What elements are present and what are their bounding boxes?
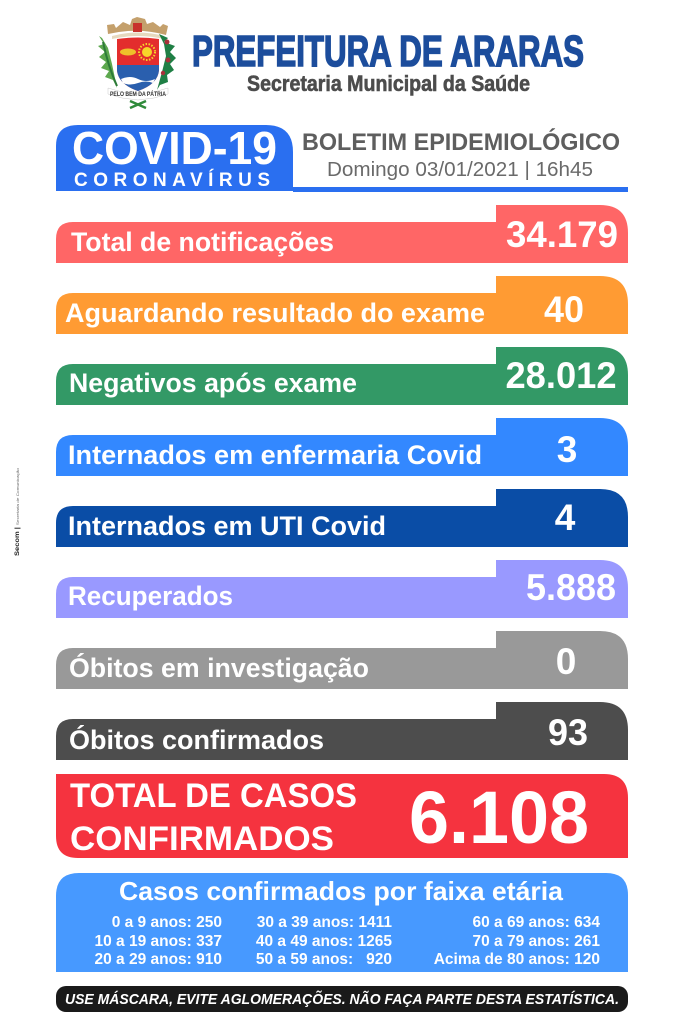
footer message: USE MÁSCARA, EVITE AGLOMERAÇÕES. NÃO FAÇA PARTE DESTA ESTATÍSTICA. bbox=[65, 990, 619, 1008]
row: Total de notificações: Total de notificações bbox=[71, 227, 334, 257]
panel: total de casos confirmados: CONFIRMADOS bbox=[70, 820, 334, 858]
footer message bbox=[56, 986, 628, 1012]
subtitle: Secretaria Municipal da Saúde bbox=[247, 71, 530, 96]
row: Recuperados: 5.888 bbox=[526, 567, 616, 608]
panel: casos por faixa etária: 30 a 39 anos: 1411 bbox=[257, 914, 392, 931]
icon: municipal coat of arms: PELO BEM DA PÁTRIA bbox=[110, 91, 167, 98]
panel: casos por faixa etária: Casos confirmados por faixa etária bbox=[119, 876, 564, 906]
row: Total de notificações: 34.179 bbox=[506, 214, 618, 255]
row: Internados em enfermaria Covid bbox=[56, 418, 628, 476]
row: Internados em UTI Covid: 4 bbox=[555, 497, 576, 538]
row: Internados em UTI Covid bbox=[56, 489, 628, 547]
header badge: COVID-19: COVID-19 bbox=[72, 122, 277, 174]
row: Negativos após exame: Negativos após exame bbox=[69, 368, 357, 398]
panel: casos por faixa etária: 20 a 29 anos: 910 bbox=[94, 951, 222, 968]
row: Negativos após exame: 28.012 bbox=[506, 355, 616, 396]
row: Negativos após exame bbox=[56, 347, 628, 405]
row: Óbitos confirmados: Óbitos confirmados bbox=[69, 724, 324, 755]
icon: municipal coat of arms bbox=[98, 17, 176, 108]
header badge: COVID-19 bbox=[56, 122, 628, 192]
panel: casos por faixa etária bbox=[56, 873, 628, 972]
row: Internados em UTI Covid: Internados em UTI Covid bbox=[68, 511, 386, 541]
row: Óbitos confirmados: 93 bbox=[548, 712, 588, 753]
panel: casos por faixa etária: Acima de 80 anos: 120 bbox=[434, 951, 600, 968]
panel: casos por faixa etária: 50 a 59 anos: 920 bbox=[256, 951, 392, 968]
panel: total de casos confirmados: TOTAL DE CASOS bbox=[70, 777, 357, 815]
row: Internados em enfermaria Covid: 3 bbox=[557, 429, 577, 470]
row: Óbitos confirmados bbox=[56, 702, 628, 760]
row: Aguardando resultado do exame: 40 bbox=[544, 289, 584, 330]
row: Óbitos em investigação: 0 bbox=[556, 641, 576, 682]
row: Aguardando resultado do exame: Aguardando resultado do exame bbox=[65, 298, 485, 328]
bulletin date: Domingo 03/01/2021 | 16h45 bbox=[327, 159, 593, 181]
row: Óbitos em investigação: Óbitos em investigação bbox=[69, 652, 369, 683]
panel: casos por faixa etária: 0 a 9 anos: 250 bbox=[112, 914, 222, 931]
panel: casos por faixa etária: 10 a 19 anos: 337 bbox=[94, 933, 222, 950]
panel: casos por faixa etária: 60 a 69 anos: 634 bbox=[472, 914, 600, 931]
sidebar credit: Secom | Secretaria de Comunicação bbox=[14, 467, 21, 556]
panel: casos por faixa etária: 70 a 79 anos: 261 bbox=[472, 933, 600, 950]
row: Aguardando resultado do exame bbox=[56, 276, 628, 334]
row: Recuperados bbox=[56, 560, 628, 618]
panel: total de casos confirmados: 6.108 bbox=[409, 776, 589, 859]
panel: total de casos confirmados bbox=[56, 774, 628, 859]
row: Recuperados: Recuperados bbox=[68, 581, 233, 611]
panel: casos por faixa etária: 40 a 49 anos: 1265 bbox=[256, 933, 392, 950]
row: Internados em enfermaria Covid: Internados em enfermaria Covid bbox=[68, 440, 482, 470]
bulletin heading: BOLETIM EPIDEMIOLÓGICO bbox=[302, 128, 620, 156]
row: Total de notificações bbox=[56, 205, 628, 263]
row: Óbitos em investigação bbox=[56, 631, 628, 689]
header badge: COVID-19: CORONAVÍRUS bbox=[74, 169, 270, 191]
